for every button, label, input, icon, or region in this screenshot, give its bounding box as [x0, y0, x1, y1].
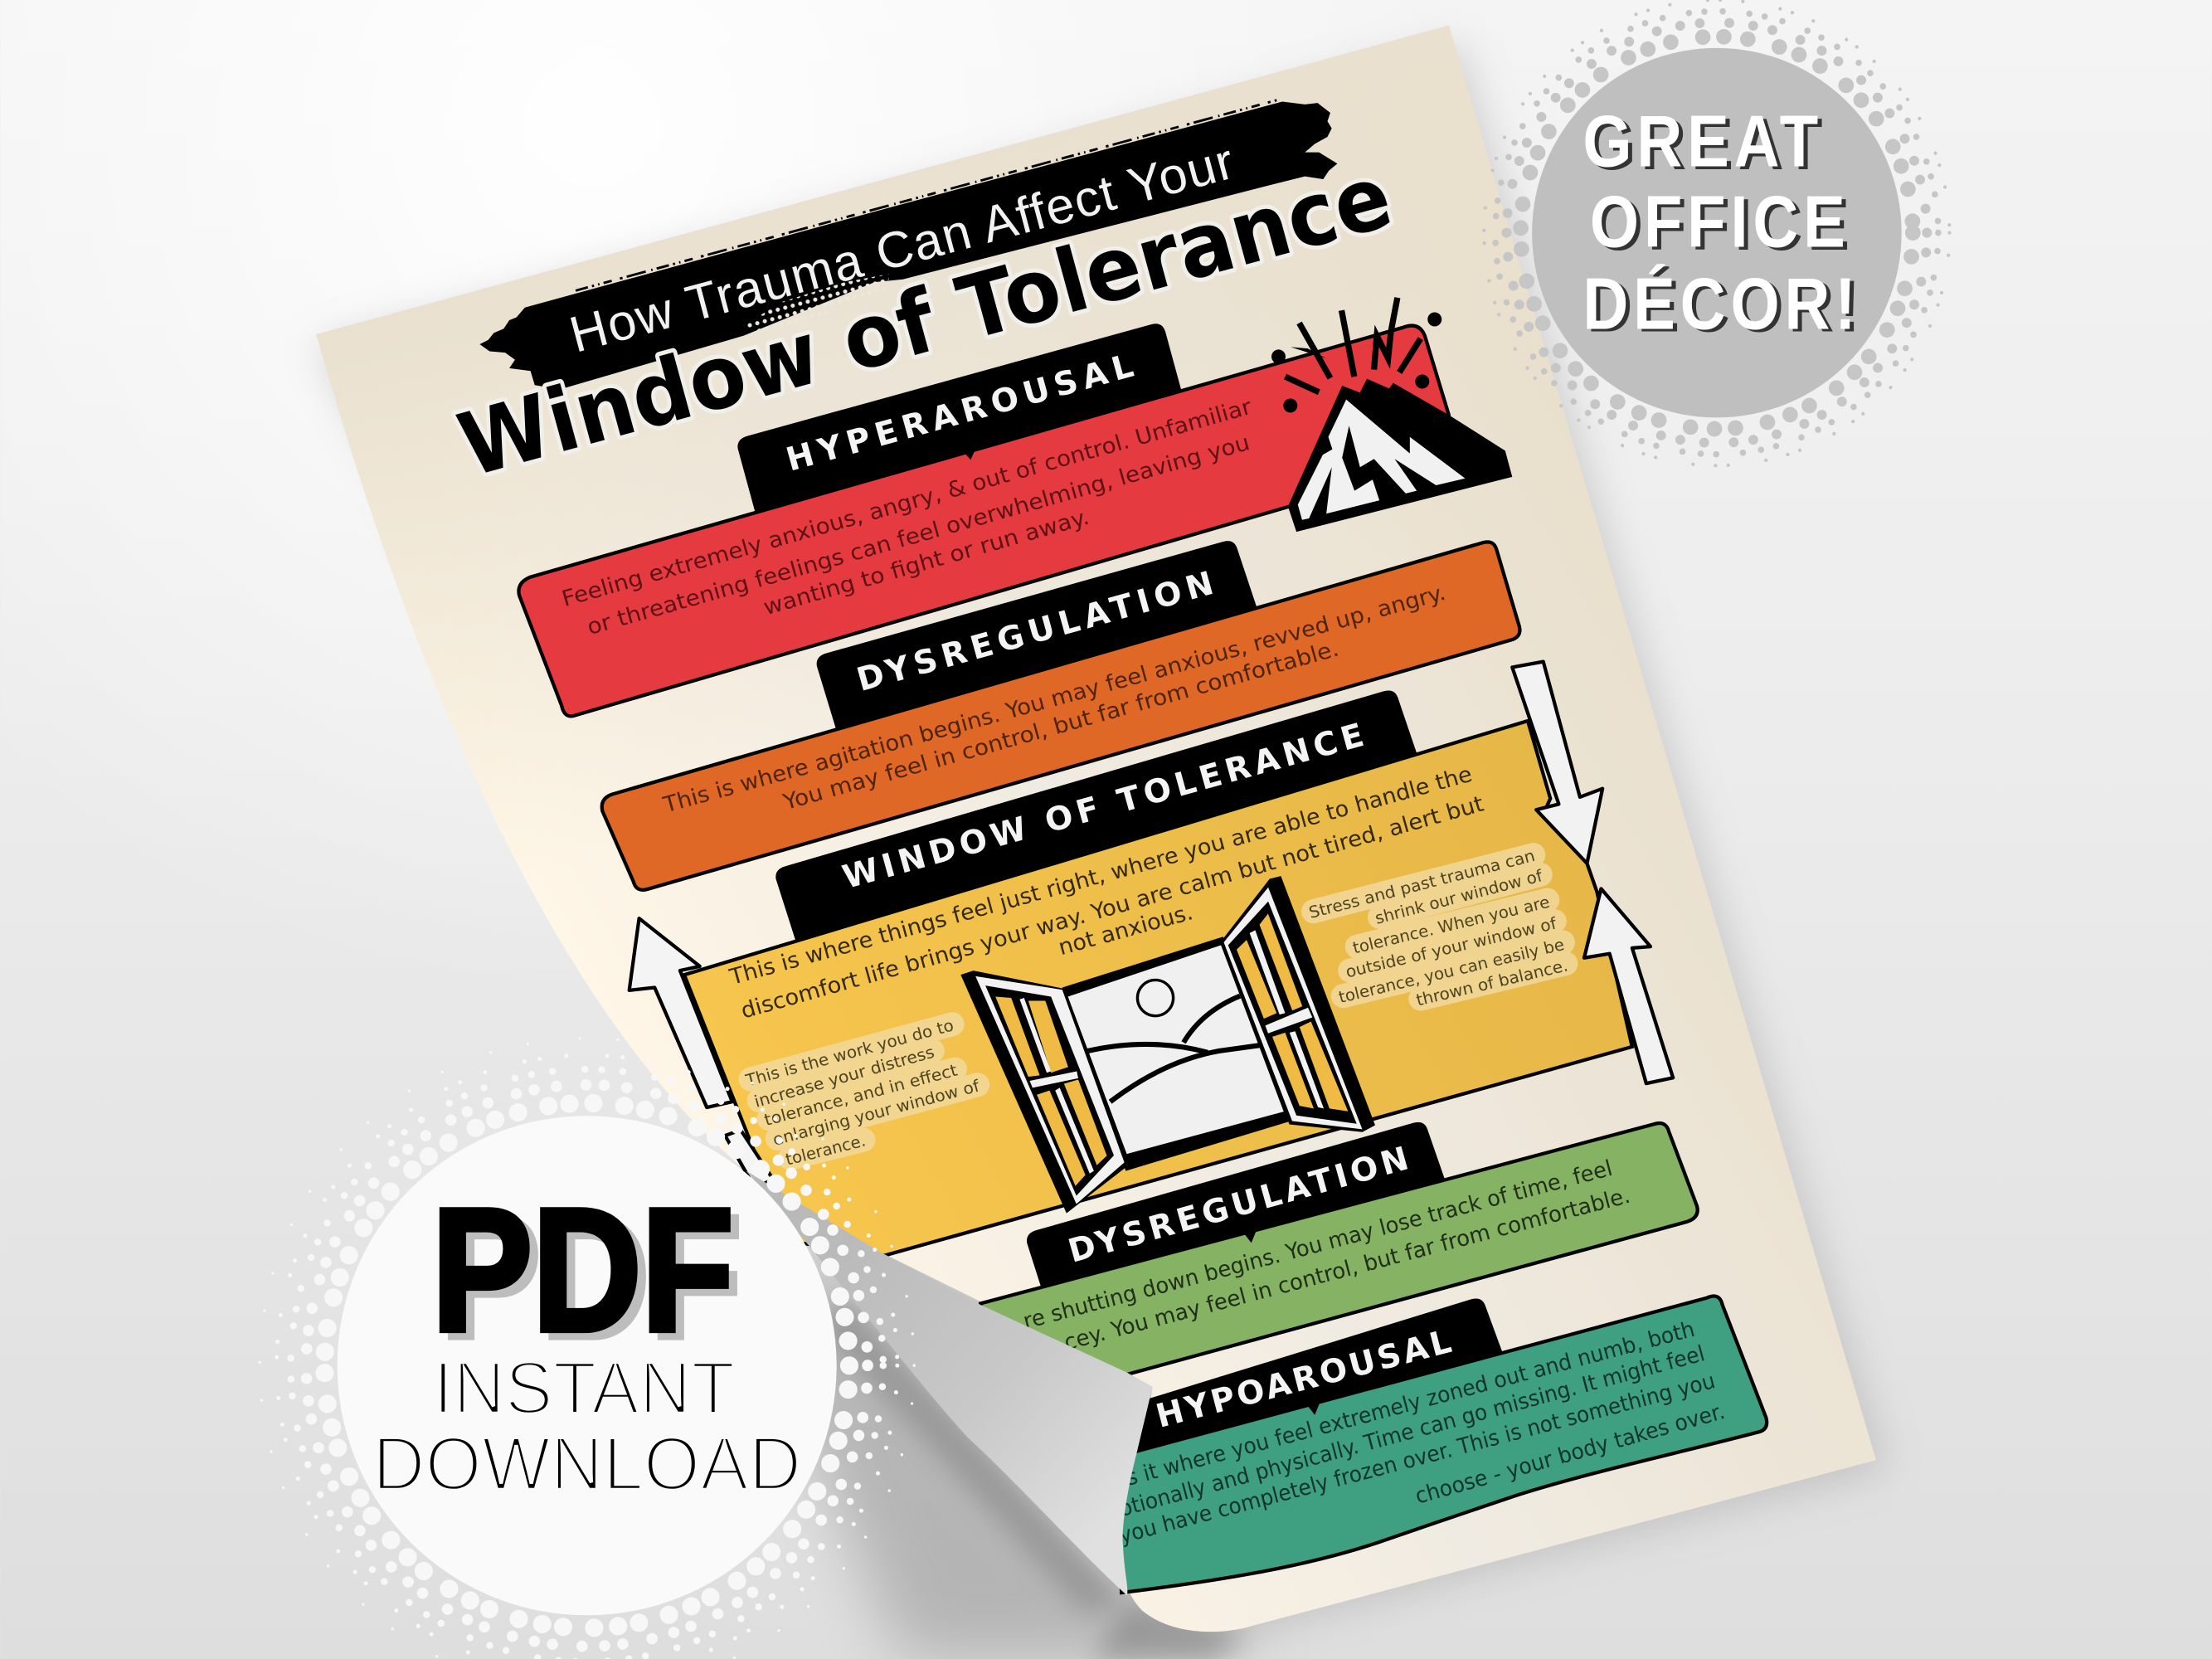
pointer [1038, 652, 1055, 669]
pdf text: PDF [432, 1172, 734, 1368]
window of tolerance text: not anxious. [1056, 900, 1196, 961]
hypoarousal text: you have completely frozen over. This is not something you [1116, 1369, 1718, 1549]
panel: hyperarousal [518, 325, 1449, 716]
callout: shrink: shrink our window of [1373, 866, 1545, 928]
pointer [1242, 1226, 1258, 1243]
pointer [1101, 831, 1119, 848]
callout: enlarge: tolerance, and in effect [762, 1060, 960, 1130]
panel: upper dysregulation [602, 542, 1519, 890]
hyperarousal text: wanting to fight or run away. [761, 505, 1092, 620]
lower dysregulation green box [980, 1123, 1698, 1397]
badge text shadow: OFFICE [1594, 184, 1855, 265]
right shutter [1220, 876, 1375, 1132]
badge text: GREAT [1582, 100, 1823, 182]
panel: hypoarousal [1115, 1297, 1767, 1593]
pointer [960, 445, 978, 460]
callout: shrink [1307, 846, 1570, 1010]
page curl flap [746, 1171, 1153, 1595]
hypoarousal text: s it where you feel extremely zoned out and numb, both [1124, 1317, 1698, 1491]
hyperarousal label: HYPERAROUSAL [782, 348, 1137, 479]
callout: shrink: tolerance, you can easily be [1337, 935, 1566, 1007]
left shutter [960, 971, 1129, 1214]
callout: shrink: Stress and past trauma can [1307, 846, 1537, 922]
icon: open window [960, 876, 1375, 1214]
hyperarousal text: Feeling extremely anxious, angry, & out of control. Unfamiliar [559, 395, 1255, 612]
title brush stroke [479, 100, 1337, 389]
subtitle: How Trauma Can Affect Your [564, 133, 1239, 363]
lower dysregulation text: re shutting down begins. You may lose track of time, feel [1021, 1156, 1615, 1335]
callout: shrink: thrown of balance. [1414, 956, 1570, 1010]
callout: enlarge: tolerance. [784, 1131, 868, 1170]
badge text: OFFICE [1590, 181, 1850, 263]
window of tolerance label: WINDOW OF TOLERANCE [839, 717, 1368, 897]
callout: shrink: tolerance. When you are [1351, 893, 1552, 958]
callout: enlarge: increase your distress [752, 1043, 936, 1112]
badge text shadow: DÉCOR! [1587, 265, 1864, 348]
lower dysregulation label: DYSREGULATION [1064, 1141, 1412, 1271]
badge: great office decor [1532, 48, 1902, 417]
icon: erupting volcano [1271, 298, 1512, 532]
arrow: up right [1584, 888, 1673, 1083]
badge text shadow [1587, 104, 1864, 348]
hypoarousal label: HYPOAROUSAL [1152, 1323, 1455, 1436]
page curl cast shadow [762, 1242, 1270, 1659]
upper dysregulation text: You may feel in control, but far from comfortable. [780, 636, 1342, 815]
hypoarousal teal box [1115, 1297, 1767, 1593]
window of tolerance text: This is where things feel just right, where you are able to handle the [727, 762, 1475, 990]
window of tolerance text: discomfort life brings your way. You are calm but not tired, alert but [738, 791, 1486, 1024]
upper dysregulation text: This is where agitation begins. You may feel anxious, revved up, angry. [660, 581, 1448, 819]
badge text: DÉCOR! [1582, 263, 1860, 345]
instant text: INSTANT [433, 1346, 735, 1430]
paper sheet [316, 26, 1876, 1632]
upper dysregulation label: DYSREGULATION [853, 565, 1218, 699]
panel: window of tolerance [684, 692, 1632, 1256]
badge text shadow: GREAT [1587, 104, 1827, 185]
callout: shrink: outside of your window of [1344, 913, 1559, 981]
badge: great office decor dots [1484, 0, 1950, 465]
callout: enlarge: This is the work you do to [743, 1015, 955, 1091]
arrow: down right [1512, 662, 1602, 864]
window pane [1062, 937, 1290, 1171]
lower dysregulation text: cey. You may feel in control, but far from comfortable. [1062, 1184, 1633, 1355]
panel: lower dysregulation [980, 1123, 1698, 1397]
hyperarousal text: or threatening feelings can feel overwhelming, leaving you [585, 431, 1252, 640]
upper dysregulation orange box [602, 542, 1519, 890]
arrow: up left [630, 918, 773, 1188]
hypoarousal text: otionally and physically. Time can go missing. It might feel [1116, 1341, 1708, 1522]
badge text [1582, 100, 1860, 345]
paper shadow [316, 42, 1888, 1643]
badge: pdf dots [260, 1039, 914, 1659]
pointer [1305, 1398, 1322, 1415]
badge: pdf instant download [338, 1116, 837, 1615]
download text: DOWNLOAD [372, 1422, 801, 1506]
callout: enlarge [743, 1015, 982, 1170]
pdf shadow: PDF [440, 1179, 742, 1374]
hypoarousal text: choose - your body takes over. [1412, 1399, 1728, 1510]
window of tolerance yellow box [684, 721, 1632, 1256]
main title: Window of Tolerance [449, 145, 1402, 497]
hyperarousal red box [518, 326, 1449, 716]
callout: enlarge: enlarging your window of [771, 1076, 982, 1150]
